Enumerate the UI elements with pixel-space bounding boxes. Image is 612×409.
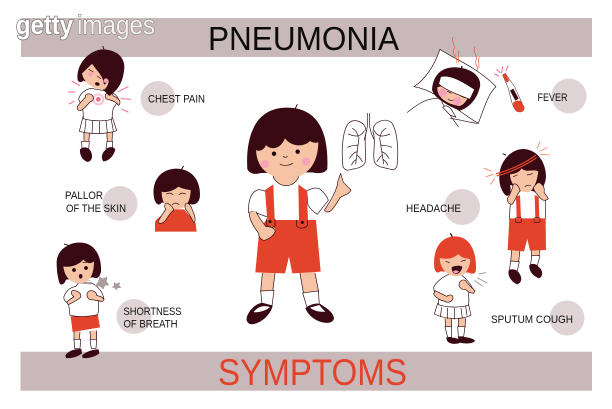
label: headache bbox=[406, 189, 480, 225]
label: sputum cough bbox=[491, 300, 584, 336]
character: headache girl bbox=[484, 142, 550, 284]
character: fever girl in bed bbox=[407, 37, 524, 127]
icon: lungs bbox=[342, 113, 398, 170]
label: fever: FEVER bbox=[538, 92, 568, 104]
symptoms banner: SYMPTOMS bbox=[218, 352, 407, 393]
central child pointing at lungs bbox=[247, 104, 351, 324]
watermark: getty bbox=[16, 10, 73, 40]
symptoms banner bbox=[20, 352, 592, 393]
label: pallor of the skin bbox=[65, 186, 138, 221]
label: shortness of breath: OF BREATH bbox=[124, 318, 178, 330]
watermark: images bbox=[77, 10, 155, 40]
label: shortness of breath bbox=[116, 299, 182, 334]
label: chest pain: CHEST PAIN bbox=[148, 94, 205, 106]
title banner: PNEUMONIA bbox=[208, 20, 399, 57]
label: fever bbox=[538, 78, 586, 114]
character: shortness of breath girl bbox=[57, 243, 121, 358]
label: pallor of the skin: OF THE SKIN bbox=[66, 203, 126, 215]
label: chest pain bbox=[140, 81, 205, 116]
watermark bbox=[16, 10, 155, 40]
character: pallor girl bbox=[154, 166, 200, 232]
character: coughing girl bbox=[434, 233, 487, 344]
label: shortness of breath: SHORTNESS bbox=[124, 306, 182, 318]
label: pallor of the skin: PALLOR bbox=[65, 190, 103, 202]
label: headache: HEADACHE bbox=[406, 203, 461, 215]
label: sputum cough: SPUTUM COUGH bbox=[491, 314, 573, 326]
character: chest pain girl bbox=[68, 46, 131, 162]
title banner bbox=[21, 18, 592, 57]
